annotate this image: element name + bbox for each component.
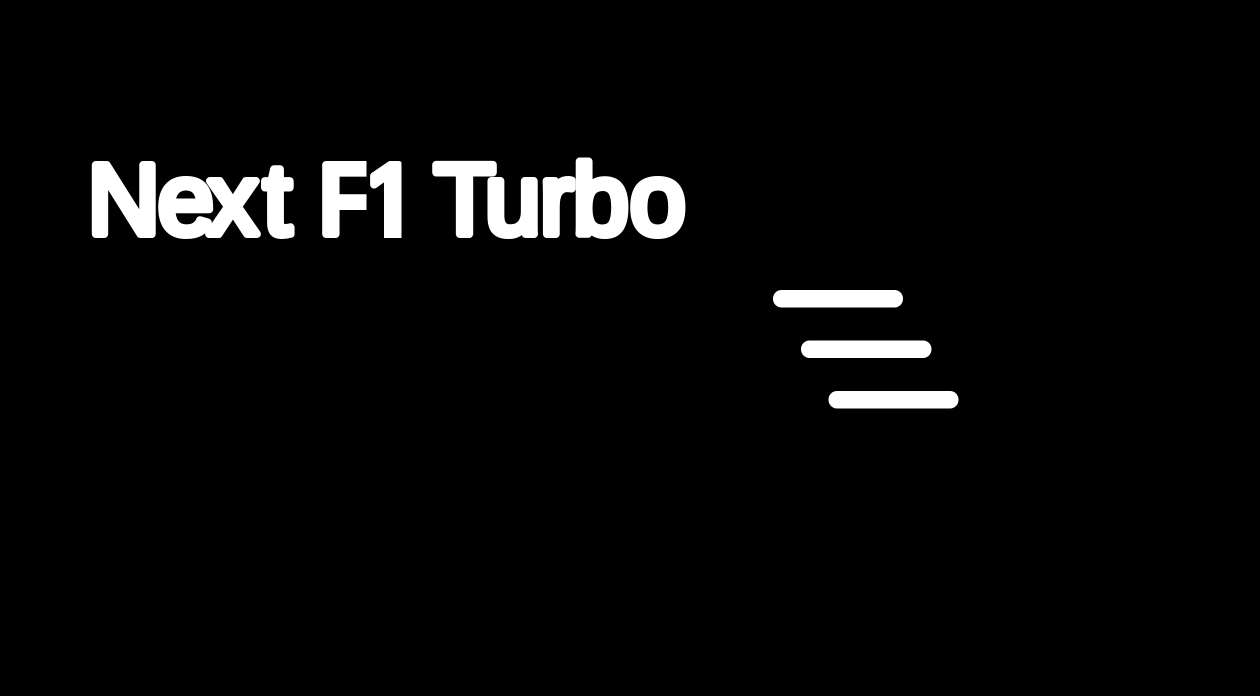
title: F (318, 144, 379, 256)
icon: three staggered speed bars (773, 290, 958, 408)
title (92, 158, 686, 239)
title: Turbo (434, 144, 686, 256)
title: Next (88, 144, 291, 256)
title: 1 (364, 144, 420, 256)
